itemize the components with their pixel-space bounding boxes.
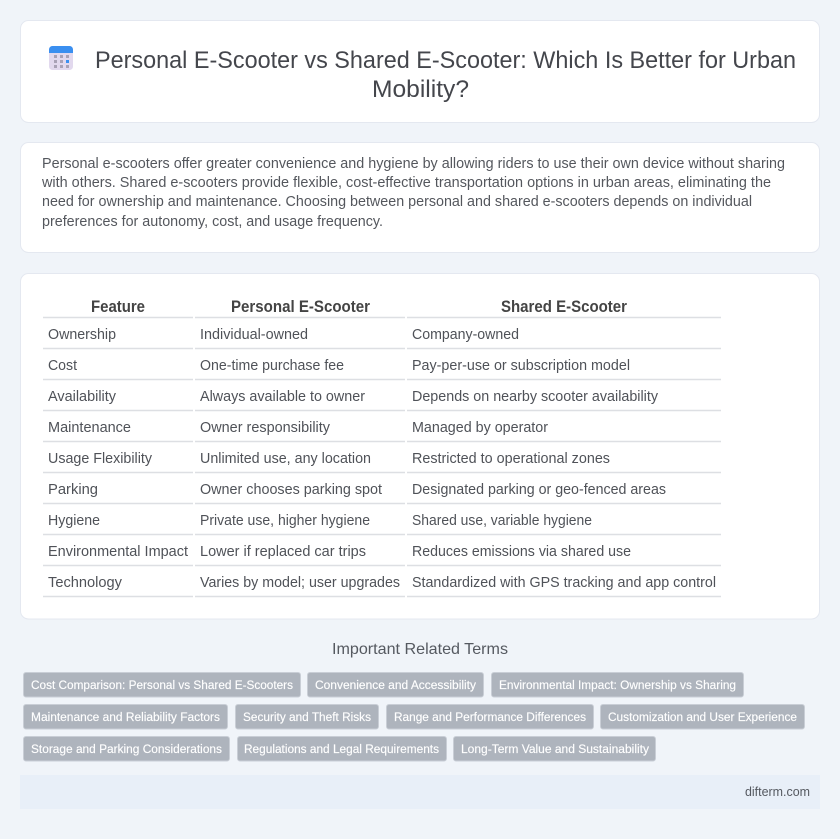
table row: cost <box>48 358 630 374</box>
table row: maintenance: Managed by operator <box>412 420 548 436</box>
footer bar <box>20 775 820 809</box>
table row: technology <box>48 575 716 591</box>
table row: parking: Parking <box>48 482 98 498</box>
table row: ownership: Individual-owned <box>200 327 308 343</box>
table header <box>91 297 627 316</box>
text block: summary: need for ownership and maintenance. Choosing between personal and shared e-scooters depends on individual <box>42 194 752 210</box>
table row: maintenance <box>48 420 548 436</box>
tag <box>236 704 378 729</box>
tag <box>454 736 656 761</box>
table row: hygiene: Private use, higher hygiene <box>200 513 370 529</box>
tag <box>308 672 484 697</box>
tag <box>600 704 804 729</box>
panel: summary paragraph <box>20 142 820 252</box>
tag: Cost Comparison: Personal vs Shared E-Scooters <box>31 678 293 692</box>
table row: ownership <box>48 327 519 343</box>
tag: Range and Performance Differences <box>394 710 586 724</box>
tag: Customization and User Experience <box>608 710 797 724</box>
table row: technology: Technology <box>48 575 123 591</box>
icon: calendar <box>49 46 73 70</box>
table header: Shared E-Scooter <box>501 297 627 316</box>
tag: Regulations and Legal Requirements <box>244 742 439 756</box>
table row: maintenance: Owner responsibility <box>200 420 331 436</box>
tag <box>492 672 744 697</box>
tag <box>24 736 230 761</box>
table row: ownership: Company-owned <box>412 327 519 343</box>
table row: technology: Varies by model; user upgrades <box>200 575 400 591</box>
tags: related terms <box>24 672 804 761</box>
table row: usage flexibility: Usage Flexibility <box>48 451 153 467</box>
table row: environmental impact <box>48 544 631 560</box>
table row: cost: Pay-per-use or subscription model <box>412 358 630 374</box>
table row: availability: Always available to owner <box>200 389 365 405</box>
tag <box>24 704 228 729</box>
table header: Personal E-Scooter <box>231 297 370 316</box>
heading: related terms: Important Related Terms <box>332 641 508 658</box>
table row: usage flexibility: Unlimited use, any location <box>200 451 371 467</box>
tag: Environmental Impact: Ownership vs Sharing <box>499 678 736 692</box>
text block: summary: preferences for autonomy, cost, and usage frequency. <box>42 214 383 230</box>
panel: title card <box>20 20 820 122</box>
table header: Feature <box>91 297 145 316</box>
table row: environmental impact: Lower if replaced car trips <box>200 544 366 560</box>
tag <box>24 672 300 697</box>
text block: summary <box>41 156 785 230</box>
title: Personal E-Scooter vs Shared E-Scooter: Which Is Better for Urban <box>95 47 796 74</box>
table row: availability: Availability <box>48 389 117 405</box>
table row: parking: Owner chooses parking spot <box>200 482 382 498</box>
table row: cost: One-time purchase fee <box>200 358 344 374</box>
tag: Maintenance and Reliability Factors <box>31 710 220 724</box>
table row: environmental impact: Reduces emissions via shared use <box>412 544 631 560</box>
footer text: difterm.com <box>745 785 810 799</box>
table row: maintenance: Maintenance <box>48 420 131 436</box>
tag <box>238 736 446 761</box>
tag <box>386 704 594 729</box>
table row: parking: Designated parking or geo-fenced areas <box>412 482 666 498</box>
tag: Security and Theft Risks <box>243 710 371 724</box>
table row: parking <box>48 482 666 498</box>
table row: ownership: Ownership <box>48 327 116 343</box>
table row: hygiene <box>48 513 592 529</box>
tag: Long-Term Value and Sustainability <box>461 742 650 756</box>
title <box>95 47 796 103</box>
table row: technology: Standardized with GPS tracking and app control <box>412 575 716 591</box>
table row: availability: Depends on nearby scooter availability <box>412 389 659 405</box>
text block: summary: with others. Shared e-scooters provide flexible, cost-effective transportation options in urban areas, eliminating the <box>41 175 771 191</box>
tag: Convenience and Accessibility <box>315 678 477 692</box>
table row: hygiene: Shared use, variable hygiene <box>412 513 592 529</box>
table row: environmental impact: Environmental Impact <box>48 544 188 560</box>
table row: usage flexibility: Restricted to operational zones <box>412 451 610 467</box>
table row: availability <box>48 389 659 405</box>
title: Mobility? <box>372 76 469 103</box>
table row: usage flexibility <box>48 451 610 467</box>
text block: summary: Personal e-scooters offer greater convenience and hygiene by allowing riders to use their own device without sharing <box>42 156 785 172</box>
tag: Storage and Parking Considerations <box>31 742 222 756</box>
table row: cost: Cost <box>48 358 77 374</box>
panel: comparison table <box>20 274 820 619</box>
table row: hygiene: Hygiene <box>48 513 100 529</box>
